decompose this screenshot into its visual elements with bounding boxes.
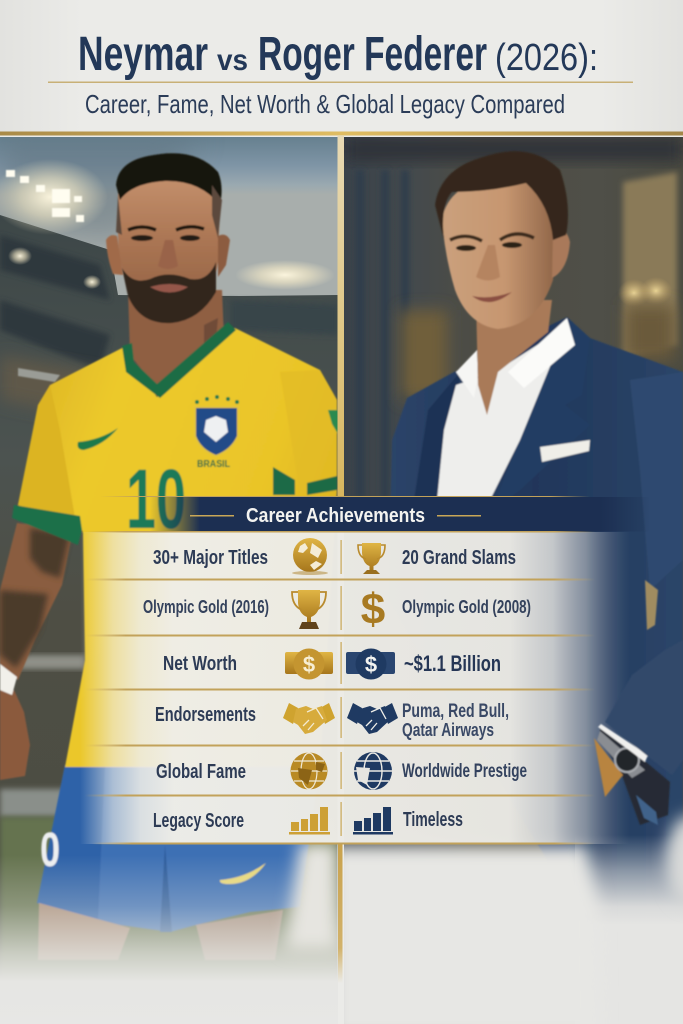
lower gold divider <box>338 843 342 983</box>
icon: gold dollar badge: $ <box>303 652 315 677</box>
neck <box>476 300 552 415</box>
title <box>78 28 598 81</box>
row: global fame: Global Fame <box>156 761 246 783</box>
title: Neymar <box>78 28 208 81</box>
row: major titles: 30+ Major Titles <box>153 547 268 569</box>
header gold bar <box>0 132 683 136</box>
photo: Neymar <box>0 137 338 1024</box>
icon: gold bars <box>289 807 330 834</box>
icon: navy bars <box>353 807 393 834</box>
title: Roger Federer <box>258 28 487 81</box>
sleeve trim <box>12 505 82 545</box>
shirt <box>436 344 552 496</box>
title: vs <box>217 44 248 77</box>
neck <box>128 290 224 392</box>
collar <box>122 322 236 398</box>
row: net worth <box>163 648 501 680</box>
head <box>443 178 556 329</box>
player: BRASIL <box>197 458 230 470</box>
icon: navy handshake <box>347 703 398 734</box>
player: 0 <box>40 824 60 877</box>
row: olympic gold: Olympic Gold (2008) <box>402 597 531 617</box>
row: legacy score <box>153 807 463 834</box>
photo: Federer <box>344 137 683 910</box>
header background <box>0 0 683 132</box>
beard <box>122 262 216 323</box>
row: endorsements: Puma, Red Bull, <box>402 701 509 722</box>
icon: gold trophy <box>358 543 385 574</box>
sleeve, watch and hand <box>594 580 683 825</box>
icon: gold cup <box>292 590 326 629</box>
row: global fame <box>156 752 527 790</box>
icon: dollar sign: $ <box>361 585 385 634</box>
row: net worth: ~$1.1 Billion <box>404 651 501 676</box>
row: endorsements <box>155 701 509 740</box>
table background <box>80 532 630 844</box>
row: endorsements: Endorsements <box>155 704 256 726</box>
player: 10 <box>126 452 186 546</box>
section heading band <box>150 497 650 532</box>
icon: navy dollar badge: $ <box>365 652 377 677</box>
stadium background <box>0 137 338 1024</box>
section heading band: Career Achievements <box>246 505 425 527</box>
head <box>117 180 220 282</box>
icon: gold handshake <box>283 703 335 734</box>
player <box>0 153 338 960</box>
row: net worth: Net Worth <box>163 653 237 675</box>
legs <box>38 903 130 960</box>
shorts <box>37 765 320 932</box>
title rule <box>48 82 633 83</box>
wristband <box>0 664 17 695</box>
icon: navy world globe <box>354 752 392 790</box>
hair <box>435 151 568 240</box>
row: legacy score: Timeless <box>403 809 463 831</box>
tattooed arm <box>0 523 73 680</box>
row: olympic gold: Olympic Gold (2016) <box>143 597 269 617</box>
room background <box>344 137 683 861</box>
man <box>388 151 683 930</box>
jersey <box>18 328 337 767</box>
row: olympic gold <box>143 585 531 634</box>
pocket square <box>540 440 590 462</box>
crest <box>195 395 239 456</box>
hair <box>116 153 222 205</box>
row: major titles: 20 Grand Slams <box>402 547 516 569</box>
row: legacy score: Legacy Score <box>153 810 244 832</box>
suit <box>388 317 683 930</box>
title: (2026): <box>495 37 598 79</box>
swoosh <box>78 428 118 450</box>
row: endorsements: Qatar Airways <box>402 720 494 740</box>
icon: gold dollar badge <box>285 648 333 680</box>
hand <box>0 690 30 780</box>
row: major titles <box>153 538 516 575</box>
icon: gold globe <box>292 538 328 575</box>
icon: navy dollar badge <box>346 648 395 680</box>
row: global fame: Worldwide Prestige <box>402 761 527 782</box>
gold vertical divider <box>338 136 344 497</box>
bottom fog <box>0 815 683 1024</box>
panel: career achievements <box>80 496 650 844</box>
icon: gold world globe <box>290 752 328 790</box>
